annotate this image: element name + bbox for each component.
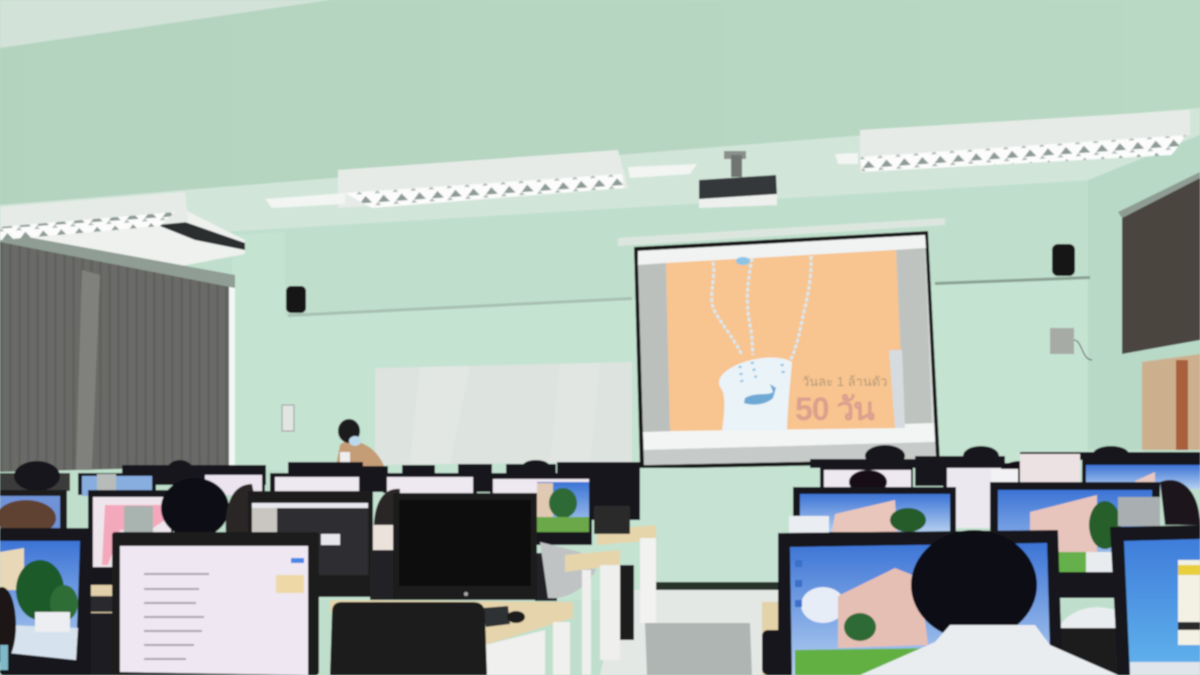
student head, centre left	[161, 478, 229, 538]
centre ceiling light	[265, 150, 697, 208]
front student	[860, 530, 1118, 675]
screen roller housing	[618, 218, 945, 246]
teacher	[336, 419, 384, 466]
grey panel near floor	[645, 623, 752, 675]
student, white and grey sleeve	[373, 489, 596, 598]
right desk items under monitor	[1060, 607, 1122, 675]
desk edge behind right monitors	[762, 602, 782, 675]
far right monitor with poster	[1110, 525, 1200, 675]
back row monitor 2	[200, 470, 265, 495]
floor	[600, 590, 780, 675]
monitor with dark web page	[248, 491, 373, 597]
left ceiling light	[0, 192, 188, 240]
front left monitor	[0, 528, 91, 675]
centre desk	[90, 585, 573, 675]
ceiling soffit	[0, 0, 1200, 205]
right speaker	[1052, 244, 1075, 276]
dark chair right of centre monitor	[535, 553, 557, 601]
dark chair behind centre monitor	[370, 550, 396, 600]
video frame: orange slide	[666, 250, 905, 431]
skirting	[655, 582, 780, 590]
wall switch box	[1050, 328, 1092, 360]
dark curtain panel	[1122, 178, 1200, 354]
wall rail right	[935, 276, 1090, 285]
right ceiling light	[835, 110, 1190, 172]
drop strands	[712, 256, 811, 365]
left speaker	[286, 286, 306, 313]
white sack with whale	[719, 358, 792, 431]
right row 2 monitor B	[990, 482, 1160, 598]
front monitor with document	[112, 532, 319, 675]
projector with mount	[699, 151, 777, 208]
dark gap between front left monitors	[88, 575, 118, 675]
wall below screen	[640, 468, 790, 585]
wooden door	[1142, 354, 1200, 450]
right row 2 monitor A	[789, 487, 956, 533]
whiteboard	[375, 362, 632, 465]
right student, far side	[1160, 480, 1200, 525]
back row dark monitors	[0, 452, 1200, 520]
right row 3 monitor 3	[1020, 454, 1200, 489]
left monitor, second row	[0, 490, 67, 536]
wall rail	[288, 297, 632, 317]
electrical panel	[282, 405, 294, 431]
front chair	[330, 602, 487, 675]
left window curtain	[0, 238, 235, 472]
slide number: 50 วัน	[795, 391, 875, 427]
student head, centre	[226, 484, 262, 535]
projection screen	[634, 231, 940, 469]
front right monitor with wallpaper	[778, 530, 1062, 675]
monitor with pink document	[88, 490, 173, 595]
air conditioner	[0, 210, 245, 288]
right row 3 monitor 1	[820, 467, 913, 494]
left pillar	[232, 232, 285, 470]
monitor with campus wallpaper, centre	[490, 473, 592, 545]
back row monitor 3	[270, 473, 362, 493]
back row monitor 1	[78, 473, 156, 496]
back row monitor 4	[383, 473, 477, 493]
ceiling underside	[0, 105, 1200, 235]
right side wall	[1088, 135, 1200, 450]
right side table	[565, 506, 656, 675]
slide caption: วันละ 1 ล้านตัว	[802, 374, 887, 389]
large black monitor	[393, 493, 537, 600]
back row heads	[14, 445, 1129, 491]
chair back, right	[762, 630, 786, 675]
right row 3 monitor 2	[943, 461, 1057, 528]
